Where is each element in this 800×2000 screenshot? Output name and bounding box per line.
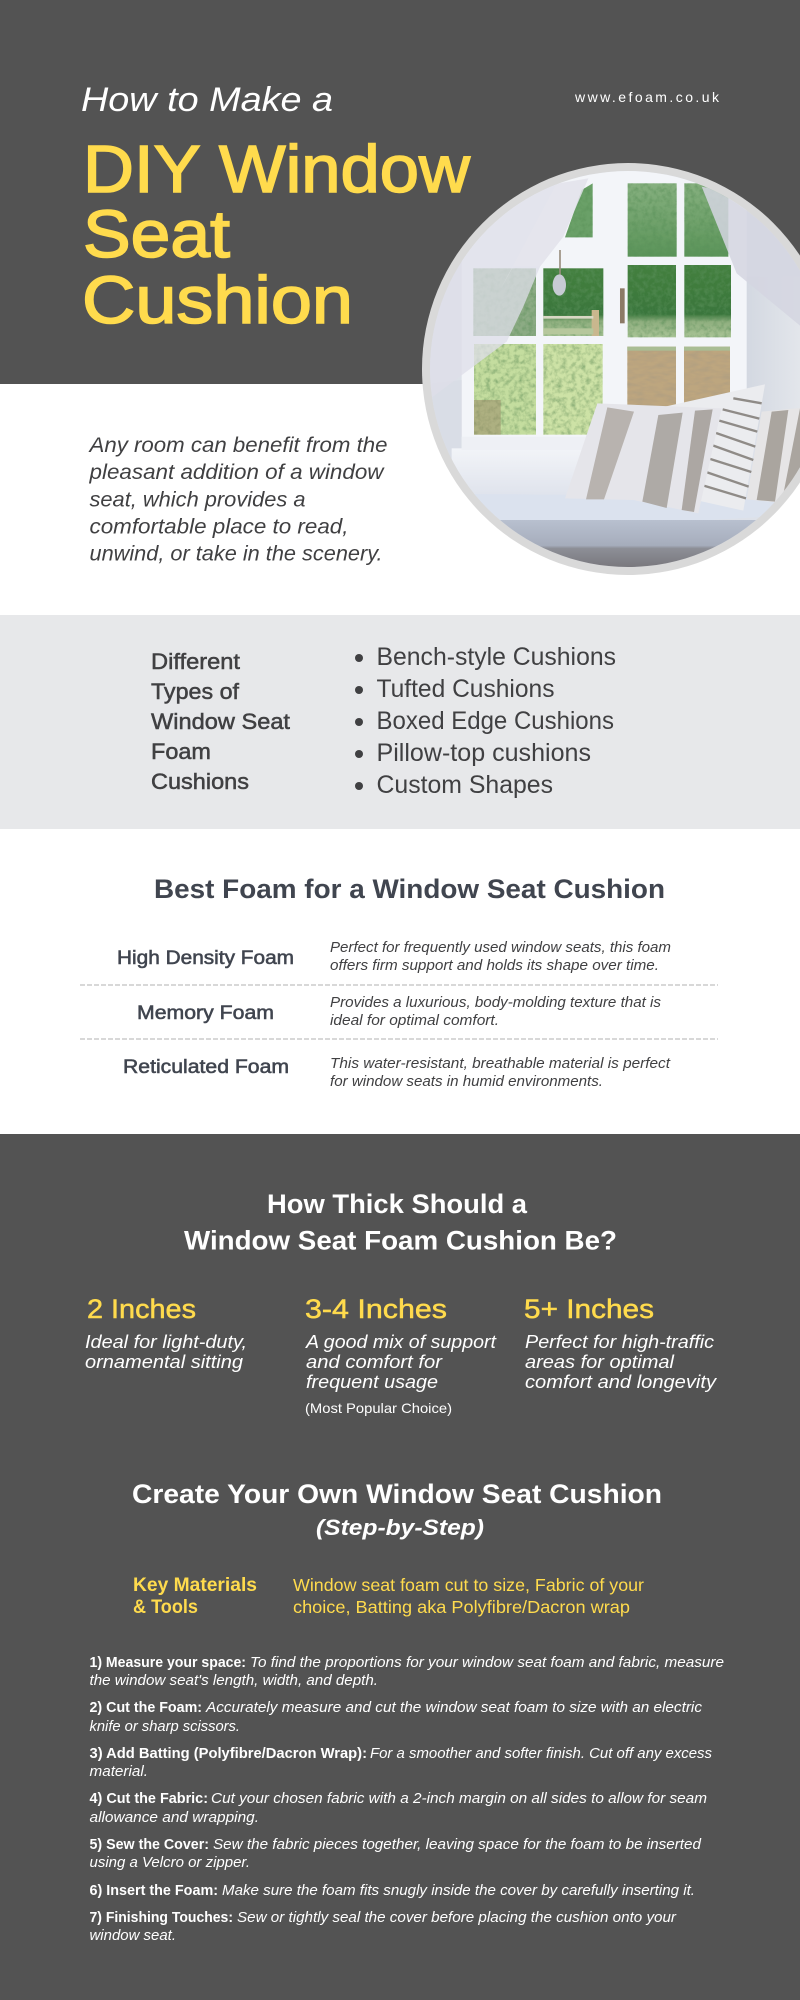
website url: www.efoam.co.uk — [574, 89, 720, 105]
heading: different types: Cushions — [151, 769, 249, 794]
thickness: 2 inches — [85, 1294, 247, 1372]
step 3: 3) Add Batting (Polyfibre/Dacron Wrap): — [90, 1746, 367, 1762]
title: Seat — [83, 197, 230, 272]
intro paragraph: Any room can benefit from the — [87, 434, 387, 457]
foam row: high density: offers firm support and holds its shape over time. — [330, 957, 659, 974]
subtitle: How to Make a — [81, 81, 333, 119]
panel: header — [0, 0, 800, 384]
heading: best foam: Best Foam for a Window Seat Cushion — [154, 874, 665, 904]
steps list — [90, 1655, 724, 1944]
title — [82, 132, 471, 338]
thickness: 5+ inches: Perfect for high-traffic — [525, 1331, 715, 1352]
step 5 — [90, 1837, 702, 1871]
heading: different types: Different — [151, 649, 240, 674]
foam row: reticulated: This water-resistant, breathable material is perfect — [330, 1055, 671, 1072]
thickness: 3-4 inches: frequent usage — [306, 1371, 438, 1392]
photo: window seat with cushions — [420, 163, 800, 577]
step 1: To find the proportions for your window seat foam and fabric, measure — [250, 1655, 724, 1671]
foam row: memory: Provides a luxurious, body-molding texture that is — [330, 994, 661, 1011]
heading: different types: Foam — [151, 739, 211, 764]
step 6: 6) Insert the Foam: — [90, 1883, 218, 1899]
step 3: For a smoother and softer finish. Cut off any excess — [370, 1746, 712, 1762]
step 1: 1) Measure your space: — [90, 1655, 246, 1671]
foam row: memory — [137, 994, 661, 1029]
step 2: 2) Cut the Foam: — [90, 1700, 202, 1716]
key materials list — [293, 1575, 644, 1617]
heading: different types: Types of — [151, 679, 240, 704]
thickness: 5+ inches: areas for optimal — [525, 1351, 675, 1372]
panel: dark lower section — [0, 1134, 800, 2000]
step 2: Accurately measure and cut the window seat foam to size with an electric — [205, 1700, 703, 1716]
handle — [620, 288, 625, 323]
key materials label: & Tools — [133, 1597, 198, 1618]
hanging heart — [559, 250, 561, 275]
thickness: 5+ inches: 5+ Inches — [524, 1294, 654, 1324]
key materials list: choice, Batting aka Polyfibre/Dacron wrap — [293, 1597, 630, 1617]
step 4: allowance and wrapping. — [90, 1810, 259, 1826]
list: cushion types — [355, 643, 616, 799]
title: Cushion — [82, 263, 353, 338]
foam row: high density — [117, 939, 671, 974]
curtains — [462, 178, 588, 375]
striped pillow — [665, 384, 765, 511]
foam row: reticulated — [123, 1055, 671, 1090]
thickness: 2 inches: ornamental sitting — [85, 1351, 244, 1372]
fence — [592, 310, 599, 336]
thickness: 3-4 inches: A good mix of support — [305, 1331, 497, 1352]
back pillow — [747, 410, 796, 502]
thickness: 3-4 inches — [305, 1294, 497, 1416]
step 3 — [90, 1746, 712, 1780]
key materials label — [133, 1575, 257, 1618]
seat top — [472, 494, 800, 521]
key materials list: Window seat foam cut to size, Fabric of your — [293, 1575, 644, 1595]
step 7: window seat. — [90, 1928, 176, 1944]
key materials label: Key Materials — [133, 1575, 257, 1596]
list: cushion types: Boxed Edge Cushions — [376, 707, 614, 735]
thickness: 3-4 inches: 3-4 Inches — [305, 1294, 447, 1324]
step 5: using a Velcro or zipper. — [90, 1855, 250, 1871]
intro paragraph: pleasant addition of a window — [88, 461, 385, 484]
step 4: 4) Cut the Fabric: — [90, 1791, 208, 1807]
panes — [565, 183, 593, 237]
intro paragraph: comfortable place to read, — [90, 516, 348, 538]
title: DIY Window — [83, 132, 471, 207]
heading: different types — [151, 649, 290, 794]
step 7: Sew or tightly seal the cover before placing the cushion onto your — [237, 1910, 677, 1926]
list: cushion types: Custom Shapes — [376, 771, 553, 799]
step 6: Make sure the foam fits snugly inside the cover by carefully inserting it. — [222, 1883, 695, 1899]
thickness: 3-4 inches: and comfort for — [306, 1351, 443, 1372]
thickness: 3-4 inches: (Most Popular Choice) — [305, 1400, 452, 1416]
foam row: reticulated: for window seats in humid environments. — [330, 1073, 603, 1090]
step 4: Cut your chosen fabric with a 2-inch margin on all sides to allow for seam — [211, 1791, 707, 1807]
seat front — [500, 520, 756, 567]
step 7 — [90, 1910, 677, 1944]
list: cushion types: Tufted Cushions — [376, 675, 554, 703]
heading: how thick: Window Seat Foam Cushion Be? — [184, 1226, 617, 1256]
thickness: 5+ inches: comfort and longevity — [525, 1371, 718, 1392]
foam row: memory: Memory Foam — [137, 1003, 274, 1024]
heading: create your own: (Step-by-Step) — [316, 1515, 484, 1540]
front pillow — [565, 403, 722, 513]
foam row: reticulated: Reticulated Foam — [123, 1057, 289, 1078]
list: cushion types: Pillow-top cushions — [376, 739, 591, 767]
panel: best foam — [80, 874, 718, 1090]
list: cushion types: Bench-style Cushions — [376, 643, 616, 671]
foam row: memory: ideal for optimal comfort. — [330, 1012, 499, 1029]
step 7: 7) Finishing Touches: — [90, 1910, 233, 1926]
heading: create your own: Create Your Own Window Seat Cushion — [132, 1479, 662, 1509]
step 2 — [90, 1700, 703, 1735]
step 5: 5) Sew the Cover: — [90, 1837, 209, 1853]
step 5: Sew the fabric pieces together, leaving space for the foam to be inserted — [213, 1837, 702, 1853]
heading: create your own — [132, 1479, 662, 1540]
heading: how thick: How Thick Should a — [267, 1189, 528, 1219]
thickness: 5+ inches — [524, 1294, 718, 1392]
panel: cushion types — [0, 615, 800, 829]
foam row: high density: High Density Foam — [117, 948, 294, 969]
step 1 — [90, 1655, 724, 1689]
step 1: the window seat's length, width, and depth. — [90, 1673, 378, 1689]
foam row: high density: Perfect for frequently used window seats, this foam — [330, 939, 671, 956]
thickness: 2 inches: 2 Inches — [87, 1294, 196, 1324]
heading: different types: Window Seat — [151, 709, 290, 734]
heading: how thick — [184, 1189, 617, 1256]
intro paragraph — [87, 434, 388, 566]
intro paragraph: unwind, or take in the scenery. — [90, 542, 382, 566]
intro paragraph: seat, which provides a — [90, 488, 306, 512]
step 3: material. — [90, 1764, 148, 1780]
step 4 — [90, 1791, 707, 1826]
step 2: knife or sharp scissors. — [90, 1719, 240, 1735]
thickness: 2 inches: Ideal for light-duty, — [85, 1331, 247, 1352]
sill and wall — [432, 380, 500, 523]
